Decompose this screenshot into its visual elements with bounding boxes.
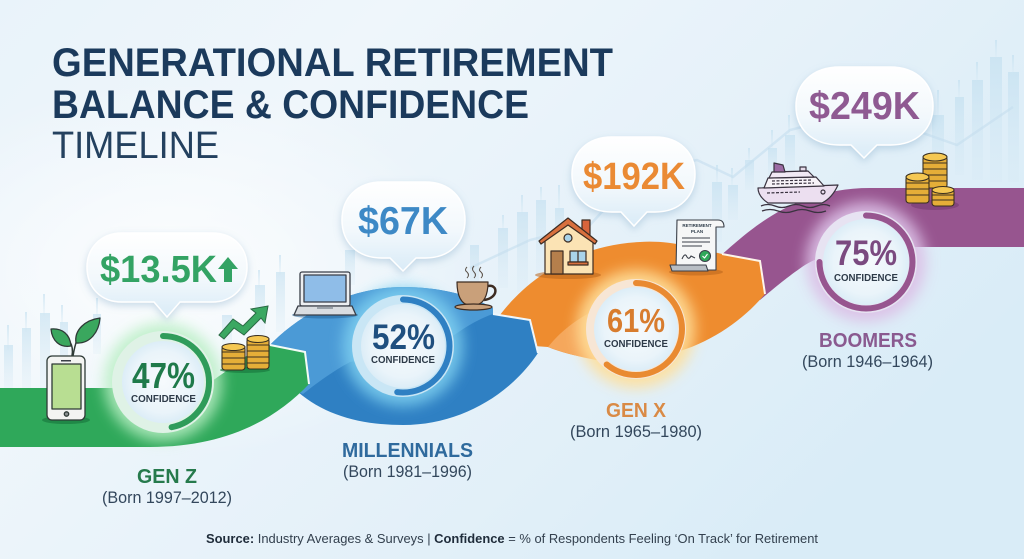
blue ribbon — [268, 287, 538, 425]
footer source note: Source: Industry Averages & Surveys | Confidence = % of Respondents Feeling ‘On Track’ for Retirement — [206, 532, 819, 546]
generation label: gen x: (Born 1965–1980) — [570, 422, 702, 441]
background candlestick chart — [4, 40, 1019, 390]
balance callout $249K: $249K — [809, 85, 920, 128]
balance callout $13.5K — [87, 233, 247, 317]
generation label: gen z — [102, 466, 232, 507]
generation label: boomers: (Born 1946–1964) — [802, 352, 933, 371]
generation label: boomers — [802, 330, 933, 371]
icon: coins and rising arrow — [219, 306, 270, 373]
generation label: gen x: GEN X — [606, 400, 667, 422]
generation label: gen x — [570, 400, 702, 441]
ring gauge 61%: CONFIDENCE — [604, 339, 668, 350]
balance callout $67K: $67K — [358, 200, 448, 243]
orange ribbon — [495, 242, 765, 358]
icon: cruise ship — [758, 163, 838, 212]
icon: laptop — [292, 272, 358, 318]
ring gauge 47%: CONFIDENCE — [131, 394, 196, 405]
title: GENERATIONAL RETIREMENT — [52, 41, 613, 85]
ring gauge 52% — [343, 286, 463, 406]
ring gauge 75%: 75% — [835, 234, 897, 273]
generation label: millennials — [342, 440, 473, 481]
panel: boomers — [720, 67, 1024, 371]
ring gauge 47%: 47% — [132, 355, 195, 396]
icon: retirement plan document — [669, 220, 724, 276]
generation label: gen z: (Born 1997–2012) — [102, 488, 232, 507]
generation label: gen z: GEN Z — [137, 466, 197, 488]
generation label: millennials: MILLENNIALS — [342, 440, 473, 462]
title: BALANCE & CONFIDENCE — [52, 83, 529, 127]
icon: phone with sprout — [42, 318, 100, 424]
title: TIMELINE — [52, 125, 219, 167]
ring gauge 75% — [806, 202, 926, 322]
icon: retirement plan document: PLAN — [691, 229, 703, 234]
background trend line — [470, 107, 1013, 268]
generation label: boomers: BOOMERS — [819, 330, 917, 352]
generation label: millennials: (Born 1981–1996) — [343, 462, 472, 481]
balance callout $13.5K: $13.5K — [100, 249, 218, 291]
ring gauge 52%: 52% — [372, 318, 435, 357]
green ribbon — [0, 345, 309, 447]
background glow — [0, 80, 470, 460]
ring gauge 75%: CONFIDENCE — [834, 273, 898, 284]
lighter ribbon fold — [268, 287, 493, 394]
panel: gen x — [495, 137, 765, 441]
balance callout $192K — [572, 137, 695, 226]
panel: gen z — [0, 233, 309, 507]
icon: retirement plan document: RETIREMENT — [682, 223, 712, 228]
white notch edge — [270, 345, 309, 384]
panel: millennials — [268, 182, 538, 481]
icon: house — [535, 218, 601, 279]
ring gauge 47% — [104, 323, 222, 441]
ring gauge 61%: 61% — [607, 302, 665, 339]
icon: coin stacks — [906, 153, 959, 210]
ring gauge 61% — [577, 270, 695, 388]
icon: coffee cup — [455, 266, 495, 310]
white notch edge — [493, 314, 538, 353]
balance callout $249K — [796, 67, 933, 158]
ring gauge 52%: CONFIDENCE — [371, 355, 435, 366]
white notch edge — [722, 254, 765, 294]
balance callout $192K: $192K — [583, 156, 686, 198]
up arrow glyph — [218, 257, 238, 282]
title — [52, 41, 613, 167]
lighter ribbon fold — [548, 310, 640, 365]
balance callout $67K — [342, 182, 465, 271]
purple ribbon — [720, 188, 1024, 300]
